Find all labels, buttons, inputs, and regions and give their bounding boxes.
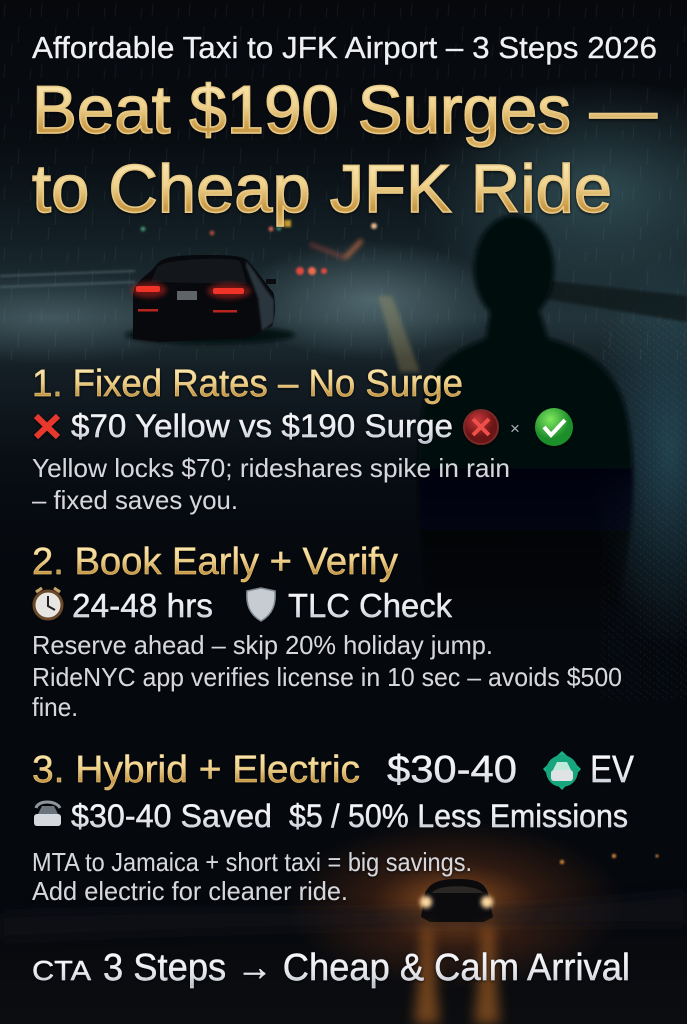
icon: red circle cross xyxy=(464,410,498,444)
TLC check: TLC Check xyxy=(288,587,452,624)
left guardrail xyxy=(0,271,135,287)
oncoming car with headlights xyxy=(0,820,687,1024)
headline: to Cheap JFK Ride xyxy=(32,151,612,227)
headline xyxy=(32,72,657,227)
multiply sign: × xyxy=(510,419,520,438)
panel: step 3 hybrid electric: $5 / 50% Less Emissions xyxy=(289,798,628,834)
call to action: 3 Steps → Cheap & Calm Arrival xyxy=(103,947,630,989)
headline: Beat $190 Surges — xyxy=(32,72,657,148)
icon: shield xyxy=(247,588,275,621)
panel: step 3 hybrid electric xyxy=(32,749,635,906)
distant lights xyxy=(140,220,377,275)
icon: EV badge xyxy=(543,751,581,790)
step 2 description: RideNYC app verifies license in 10 sec – avoids $500 xyxy=(32,662,622,692)
step 1 heading: 1. Fixed Rates – No Surge xyxy=(32,363,463,405)
panel: step 1 fixed rates xyxy=(32,363,573,515)
step 2 description: fine. xyxy=(32,692,78,722)
icon: car xyxy=(34,802,61,826)
booking window: 24-48 hrs xyxy=(72,587,213,624)
step 1 description: – fixed saves you. xyxy=(32,485,238,515)
icon: red cross xyxy=(36,416,58,437)
road reflections xyxy=(378,296,420,372)
icon: green check xyxy=(535,408,573,446)
step 2 heading: 2. Book Early + Verify xyxy=(32,541,398,583)
step 3 heading: 3. Hybrid + Electric xyxy=(32,749,360,791)
silhouette of a person xyxy=(418,215,633,640)
sedan with red tail lights xyxy=(125,255,295,344)
EV label: EV xyxy=(590,749,635,791)
call to action: CTA xyxy=(32,955,91,986)
icon: alarm clock xyxy=(34,588,62,619)
step 3 description: MTA to Jamaica + short taxi = big savings. xyxy=(32,847,472,877)
right barrier xyxy=(530,279,687,322)
price comparison: $70 Yellow vs $190 Surge xyxy=(71,408,453,444)
title: Affordable Taxi to JFK Airport – 3 Steps 2026 xyxy=(32,30,657,65)
step 3 description: Add electric for cleaner ride. xyxy=(32,876,348,906)
savings and emissions: $30-40 Saved xyxy=(71,798,272,834)
step 2 description: Reserve ahead – skip 20% holiday jump. xyxy=(32,630,493,660)
step 1 description: Yellow locks $70; rideshares spike in rain xyxy=(32,453,510,483)
panel: step 2 book early xyxy=(32,541,629,722)
price range: $30-40 xyxy=(387,749,517,791)
